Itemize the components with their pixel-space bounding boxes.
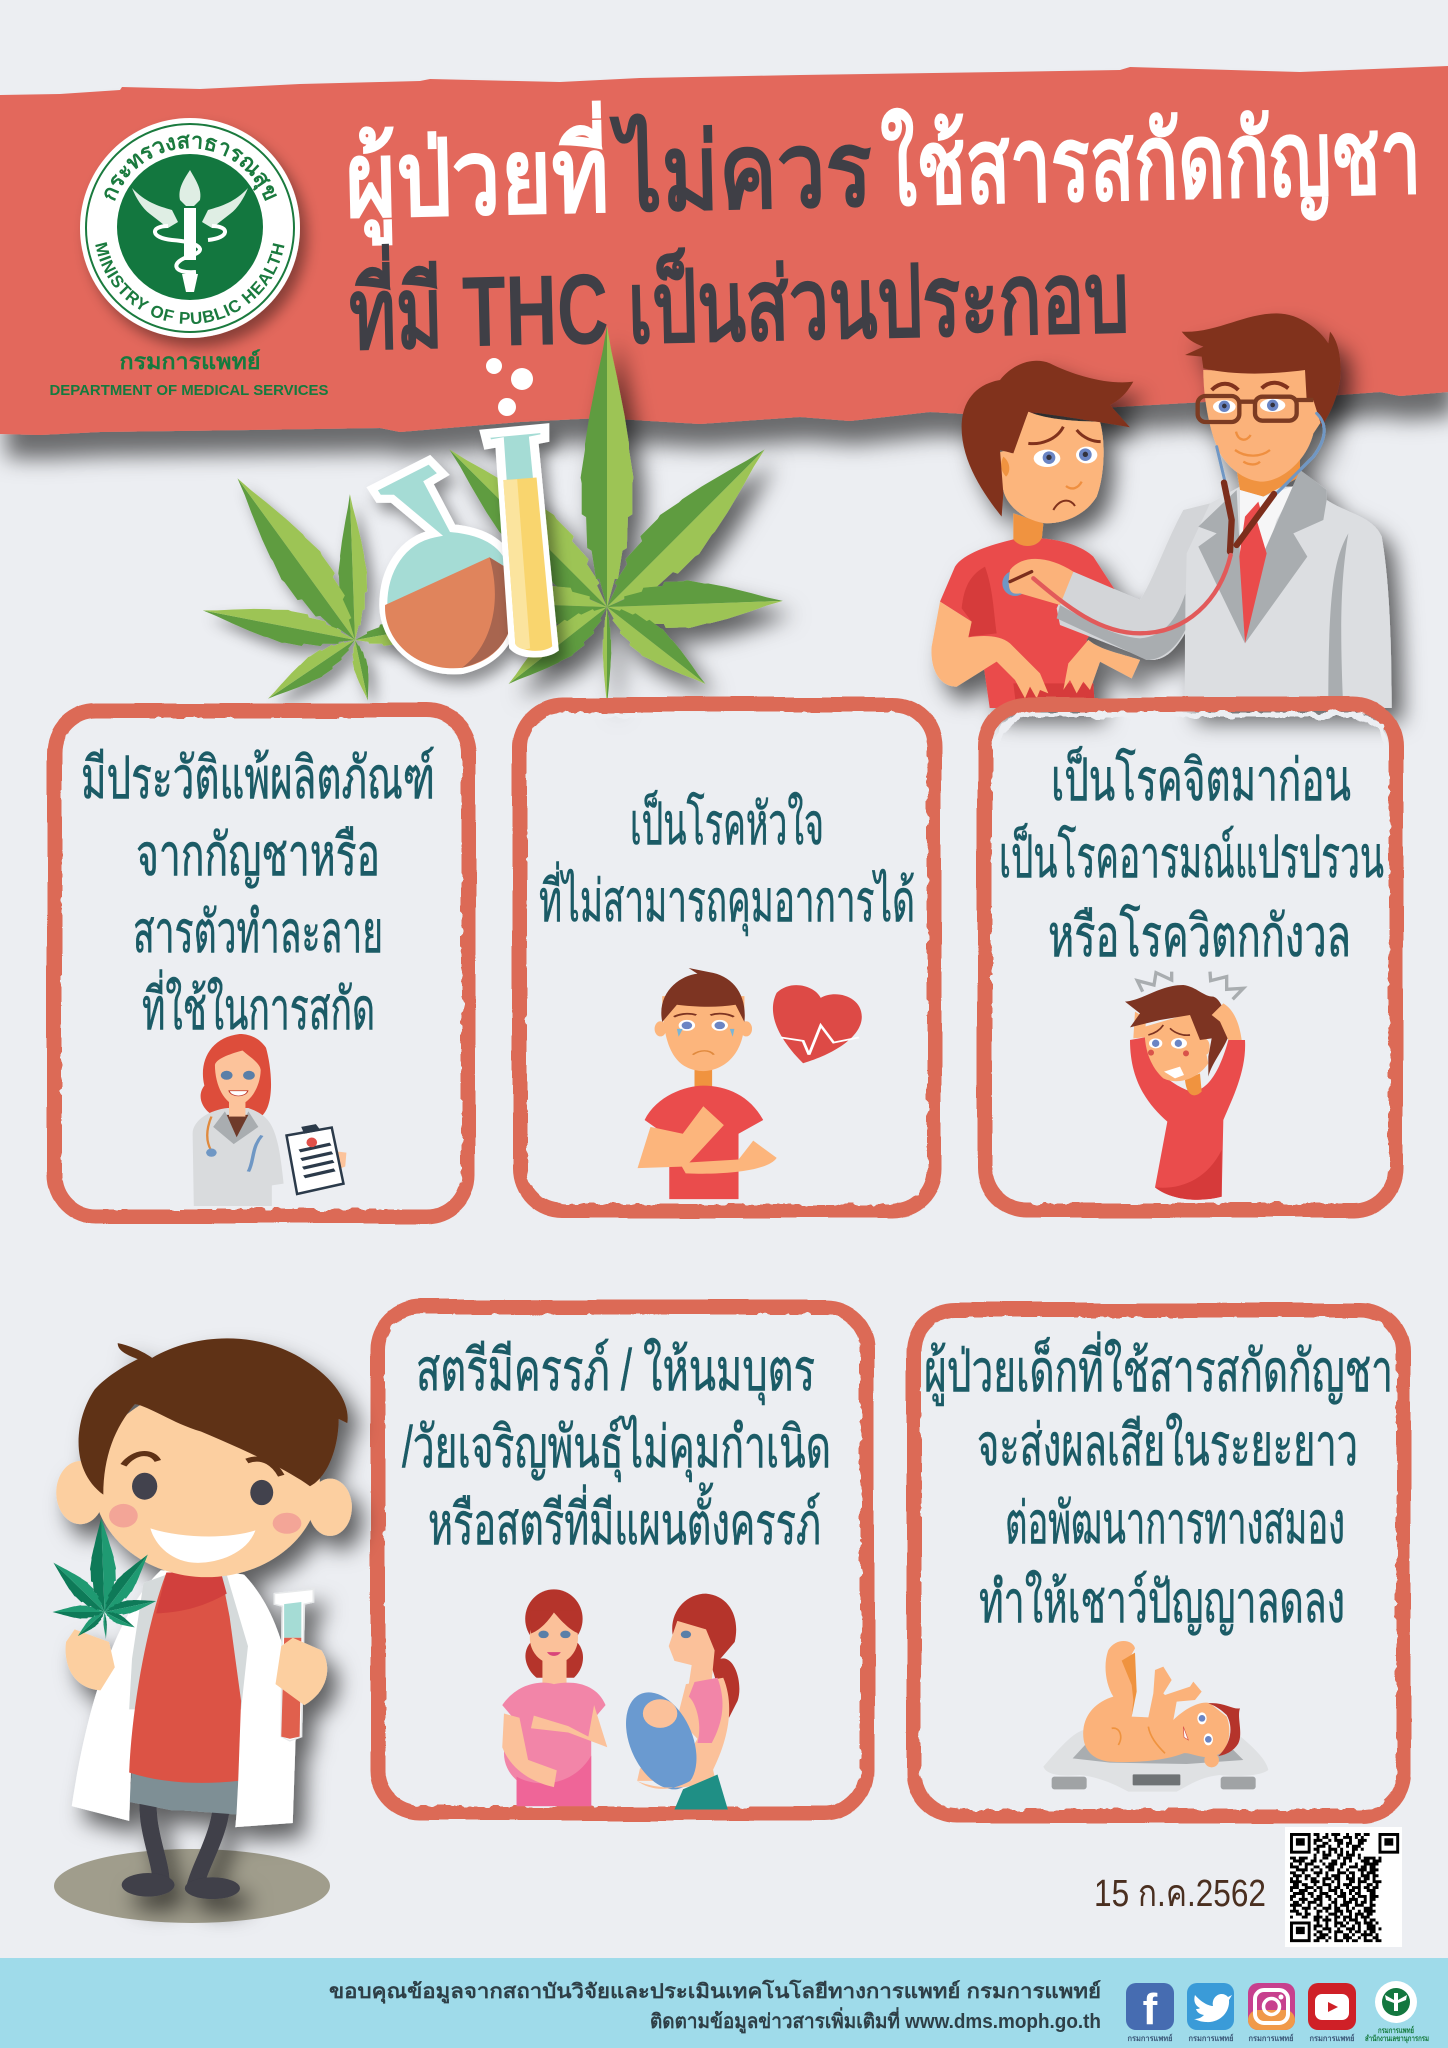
date: 15 ก.ค.2562 [1094, 1873, 1266, 1915]
doctor figure [1057, 313, 1392, 713]
icon: test tube [485, 428, 554, 653]
icon: female doctor with clipboard [193, 1034, 346, 1206]
icon: boy holding chest [638, 968, 862, 1199]
frame [54, 711, 468, 1216]
text block: มีประวัติแพ้ผลิตภัณฑ์ [81, 746, 435, 811]
text block [402, 1337, 831, 1557]
text block [539, 790, 915, 937]
icon: twitter [1187, 1983, 1234, 2030]
social icon captions: กรมการแพทย์ [1248, 2033, 1294, 2043]
text block: หรือสตรีที่มีแผนตั้งครรภ์ [428, 1483, 821, 1557]
panel: allergy history [54, 711, 468, 1216]
icon: small ministry seal [1375, 1981, 1417, 2023]
text block [924, 1331, 1393, 1635]
icon: facebook: f [1143, 1985, 1158, 2034]
footer text line 1: ขอบคุณข้อมูลจากสถาบันวิจัยและประเมินเทคโนโลยีทางการแพทย์ กรมการแพทย์ [329, 1979, 1101, 2005]
text block: สตรีมีครรภ์ / ให้นมบุตร [416, 1337, 815, 1406]
footer band [0, 1958, 1448, 2048]
panel: child patients [914, 1310, 1403, 1816]
text block: เป็นโรคหัวใจ [630, 790, 824, 857]
figure [56, 1338, 352, 1899]
footer text line 2: ติดตามข้อมูลข่าวสารเพิ่มเติมที่ www.dms.moph.go.th [650, 2006, 1101, 2035]
frame [985, 704, 1396, 1210]
icon: small cannabis leaf [200, 464, 486, 709]
stethoscope [1002, 413, 1324, 633]
text block: ที่ไม่สามารถคุมอาการได้ [539, 861, 915, 937]
icon: baby on scale [1043, 1641, 1268, 1792]
text block [81, 746, 435, 1042]
logo caption English: DEPARTMENT OF MEDICAL SERVICES [50, 382, 328, 399]
text block: /วัยเจริญพันธุ์ไม่คุมกำเนิด [402, 1414, 831, 1483]
icon: broken heart [773, 985, 862, 1063]
text block: สารตัวทำละลาย [133, 900, 383, 965]
title line 1 [343, 82, 1422, 247]
title line 1: ไม่ควร [609, 108, 873, 234]
panel: heart disease [520, 705, 934, 1211]
social icon captions [1128, 2025, 1429, 2044]
icon: bubbles [486, 358, 533, 416]
icon: facebook [1126, 1983, 1174, 2034]
icon: anxious person [1125, 972, 1245, 1200]
logo: Ministry of Public Health seal [78, 118, 316, 356]
icon: youtube [1308, 1983, 1356, 2030]
seal text top: กระทรวงสาธารณสุข [104, 134, 277, 201]
social icon captions: กรมการแพทย์ [1128, 2033, 1173, 2043]
icon: mother and pregnant woman [502, 1589, 739, 1809]
social icon captions: สำนักงานเลขานุการกรม [1365, 2034, 1429, 2044]
logo caption Thai: กรมการแพทย์ [120, 349, 260, 374]
icon: large cannabis leaf [430, 326, 784, 707]
ground shadow [54, 1849, 330, 1923]
seal text bottom: MINISTRY OF PUBLIC HEALTH [95, 242, 284, 324]
panel: pregnancy [378, 1307, 867, 1813]
frame [378, 1307, 867, 1813]
frame [914, 1310, 1403, 1816]
title line 1: ผู้ป่วยที่ [343, 100, 611, 247]
banner [0, 66, 1448, 435]
icon: instagram [1248, 1983, 1295, 2030]
title line 2: ที่มี THC เป็นส่วนประกอบ [348, 226, 1130, 371]
nursing mother [614, 1594, 739, 1809]
icon: flask [372, 460, 516, 670]
social icon captions: กรมการแพทย์ [1378, 2025, 1414, 2035]
text block: จากกัญชาหรือ [136, 823, 380, 888]
social icon captions: กรมการแพทย์ [1310, 2033, 1355, 2043]
illustration: cartoon doctor with leaf and tube [47, 1338, 352, 1923]
icon: green leaf [47, 1518, 158, 1640]
pregnant woman [502, 1589, 607, 1806]
social icon captions: กรมการแพทย์ [1188, 2033, 1234, 2043]
frame [520, 705, 934, 1211]
text block: ที่ใช้ในการสกัด [142, 969, 375, 1042]
patient figure [931, 361, 1140, 710]
panel: mental illness [985, 704, 1396, 1210]
text block [999, 746, 1384, 969]
seal emblem [132, 170, 248, 292]
QR code [1285, 1827, 1402, 1947]
illustration: patient and doctor [931, 313, 1392, 713]
